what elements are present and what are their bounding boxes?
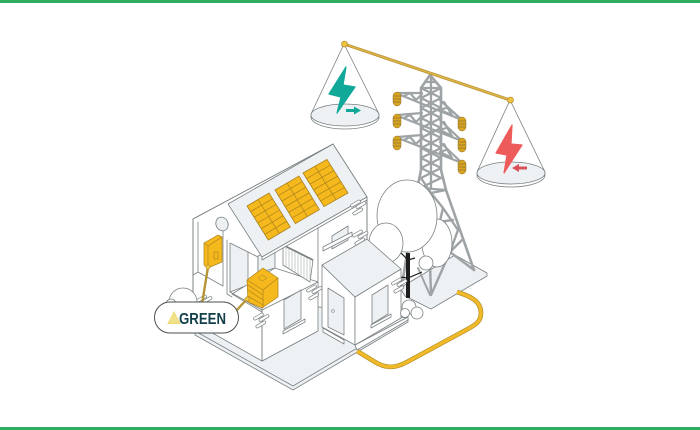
interior doorway <box>230 243 248 292</box>
cloud behind logo <box>166 288 197 316</box>
scale beam <box>344 44 510 100</box>
tower arms <box>398 93 462 163</box>
upper side window <box>323 226 352 251</box>
insulators <box>393 92 466 174</box>
front window <box>284 290 301 329</box>
connection wires <box>202 265 249 311</box>
balance scale <box>311 41 545 187</box>
rear roof and walls <box>193 144 367 361</box>
top green bar <box>0 0 700 3</box>
bottom green bar <box>0 427 700 430</box>
logo badge <box>154 302 238 333</box>
side front wall edge <box>193 197 367 361</box>
annex roof <box>322 239 401 297</box>
lower tower legs <box>417 190 474 295</box>
solar panel 3 <box>303 159 348 207</box>
left pan <box>311 44 379 129</box>
bushes <box>400 300 423 319</box>
solar panel 2 <box>275 176 319 224</box>
logo triangle <box>168 312 180 324</box>
interior floor <box>232 268 318 312</box>
house base plate <box>195 300 408 390</box>
annex window <box>372 285 388 324</box>
icon: teal bolt <box>329 67 355 113</box>
annex plinth <box>355 317 408 350</box>
tower body outline <box>402 75 474 285</box>
annex right wall <box>355 269 401 345</box>
annex door <box>328 288 344 335</box>
annex left wall <box>322 265 355 345</box>
wall unit <box>204 235 222 268</box>
left pivot <box>342 41 348 47</box>
annex bricks <box>391 278 407 294</box>
wall bricks <box>196 200 368 329</box>
interior left room <box>193 222 223 286</box>
main house <box>193 144 368 361</box>
icon: teal arrow <box>346 106 361 114</box>
tower ground plate <box>400 255 487 309</box>
trees <box>369 180 452 298</box>
roof <box>228 144 367 257</box>
logo text: GREEN <box>179 311 226 328</box>
round attic window <box>214 215 230 233</box>
icon: red bolt <box>496 125 522 173</box>
annex <box>322 239 408 350</box>
front wall <box>262 282 318 361</box>
home battery <box>247 268 278 308</box>
tower body lattice <box>420 88 446 190</box>
icon: red arrow <box>512 164 527 172</box>
solar panel 1 <box>247 193 290 240</box>
transmission tower <box>393 75 474 295</box>
right pivot <box>508 97 514 103</box>
right pan <box>477 100 545 187</box>
cable <box>357 292 481 367</box>
radiator <box>283 245 313 282</box>
